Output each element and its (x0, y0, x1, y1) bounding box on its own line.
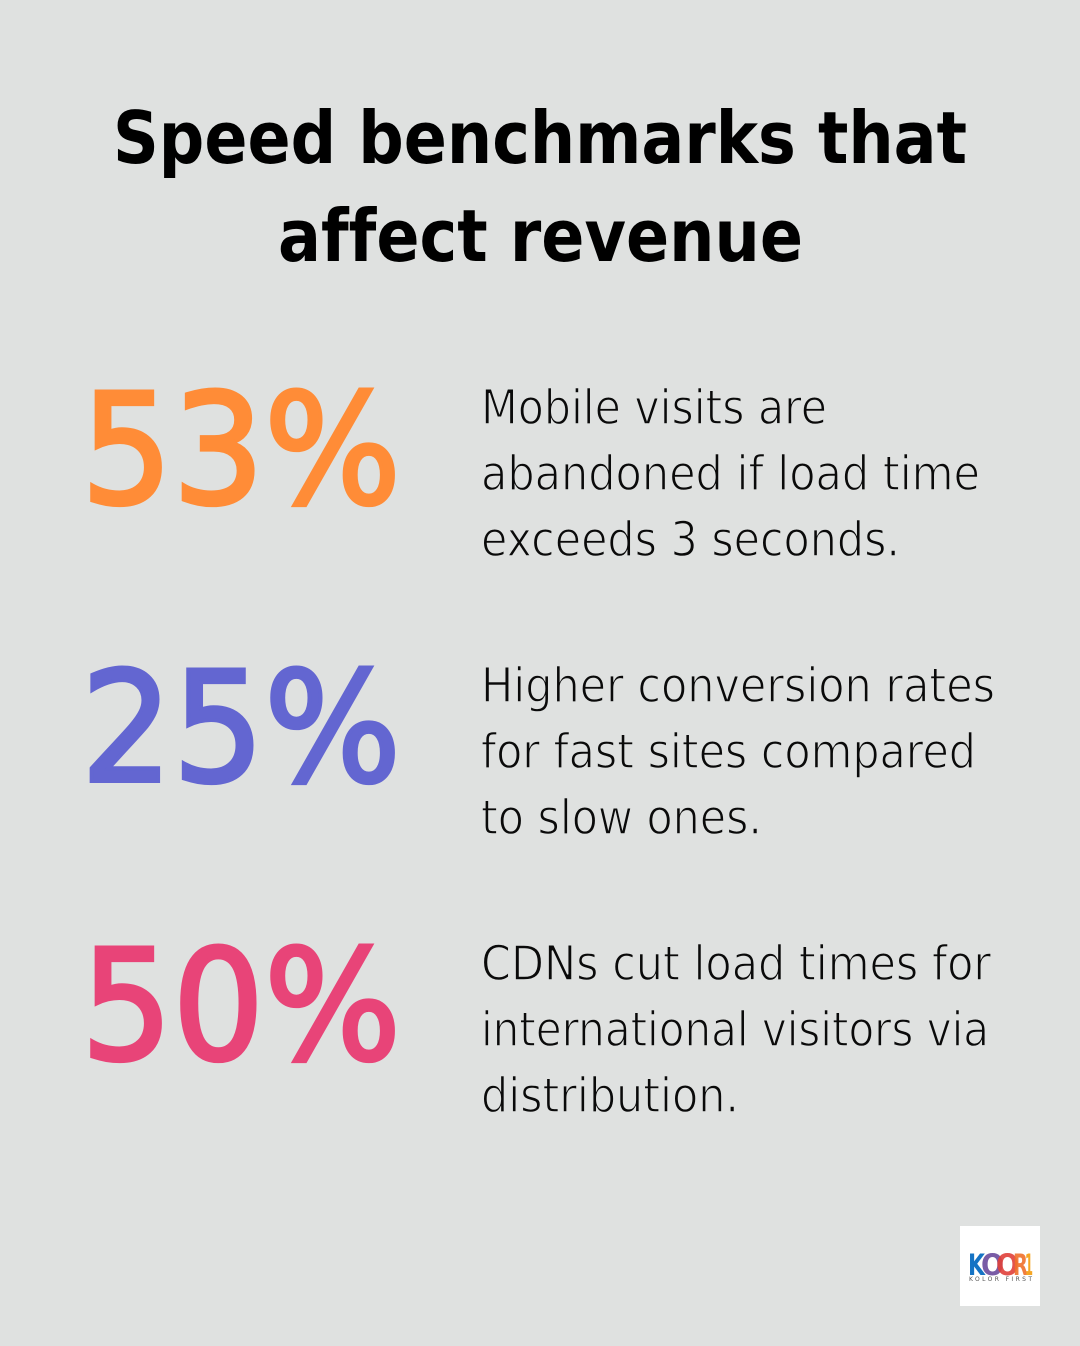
description: conversion rates: to slow ones. (481, 790, 762, 846)
description: mobile visits (481, 380, 980, 568)
description: CDNs: international visitors via (481, 1002, 989, 1058)
logo: Koor1 Kolor First: KOLOR FIRST (969, 1276, 1032, 1283)
stat: 50% (81, 918, 991, 1124)
logo: Koor1 Kolor First: R (1013, 1248, 1028, 1282)
title (113, 96, 967, 278)
title: Speed benchmarks that (113, 96, 967, 180)
logo: Koor1 Kolor First: K (968, 1248, 986, 1282)
description: CDNs (481, 936, 991, 1124)
stat: 25% (81, 640, 995, 846)
logo: Koor1 Kolor First: 1 (1025, 1248, 1033, 1282)
description: conversion rates: Higher conversion rates (481, 658, 995, 714)
logo: Koor1 Kolor First: O (996, 1248, 1019, 1282)
description: conversion rates (481, 658, 995, 846)
description: mobile visits: abandoned if load time (481, 446, 980, 502)
description: CDNs: distribution. (481, 1068, 739, 1124)
description: conversion rates: for fast sites compared (481, 724, 976, 780)
logo: Koor1 Kolor First (960, 1226, 1040, 1306)
number: 25%: 25% (81, 640, 401, 818)
number: 53%: 53% (81, 362, 401, 540)
description: mobile visits: Mobile visits are (481, 380, 827, 436)
stat: 53% (81, 362, 980, 568)
number: 50%: 50% (81, 918, 401, 1096)
title: affect revenue (278, 194, 803, 278)
description: mobile visits: exceeds 3 seconds. (481, 512, 900, 568)
description: CDNs: CDNs cut load times for (481, 936, 991, 992)
logo: Koor1 Kolor First: O (981, 1248, 1004, 1282)
